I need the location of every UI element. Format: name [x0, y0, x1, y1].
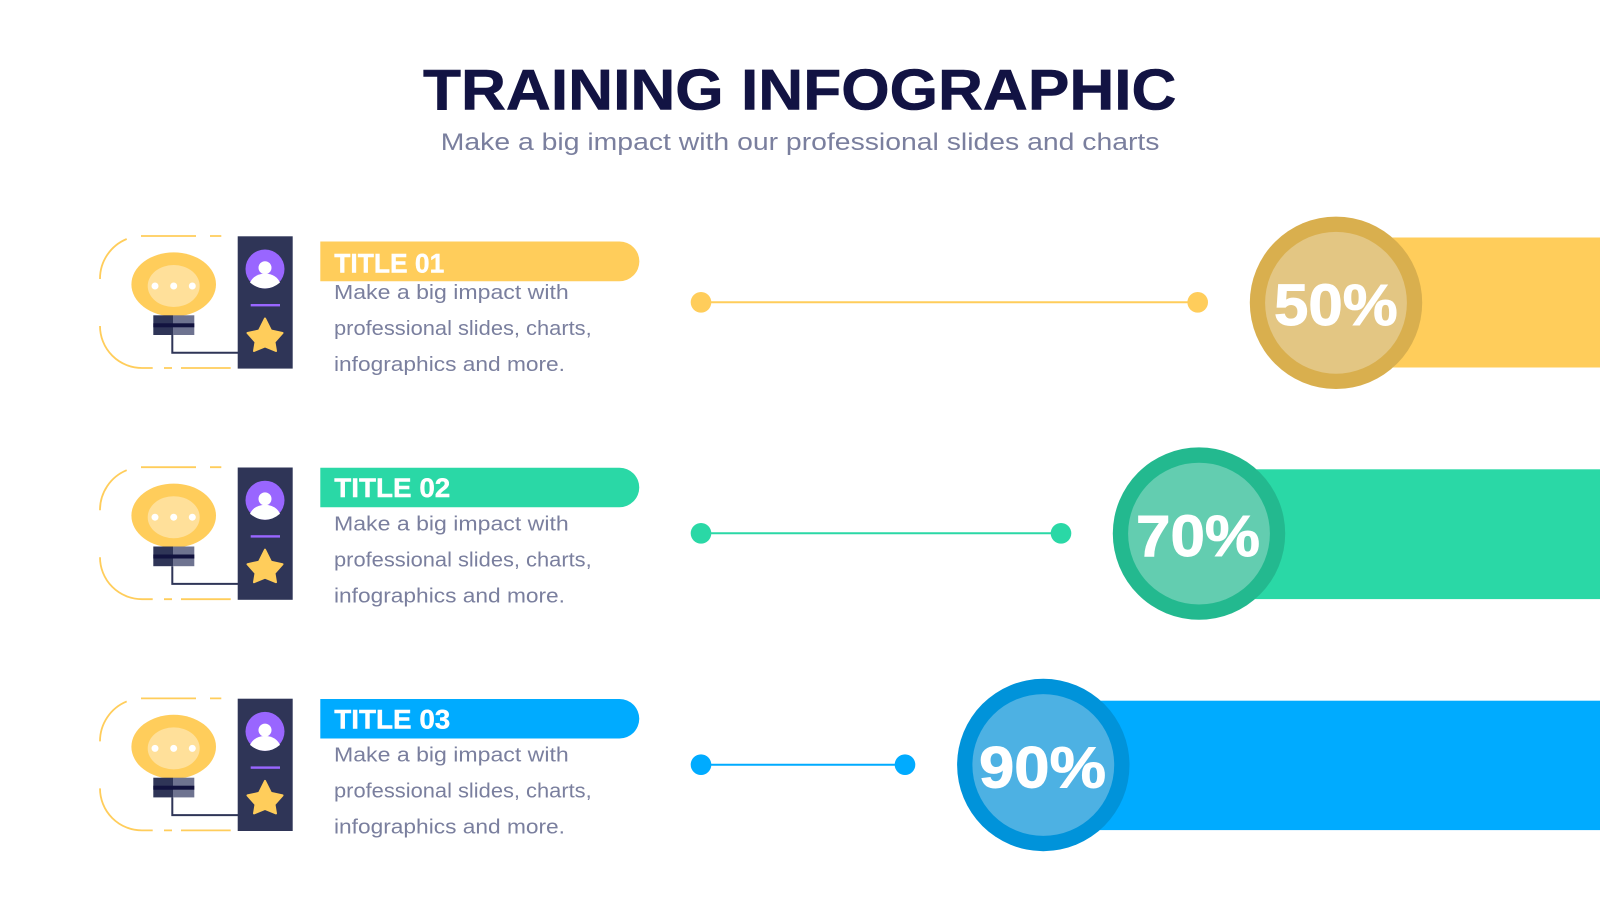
icon: light bulb and profile card — [100, 236, 293, 369]
subtitle: Make a big impact with our professional slides and charts — [441, 129, 1160, 156]
description 01: Make a big impact with — [334, 282, 569, 304]
connector 01 — [691, 292, 1208, 313]
description 03 — [334, 745, 592, 839]
percent badge 90% — [957, 679, 1130, 851]
icon: light bulb and profile card — [100, 467, 293, 600]
title bar 01: TITLE 01 — [334, 249, 444, 279]
icon: light bulb and profile card — [100, 698, 293, 831]
connector 03 — [691, 754, 915, 775]
title bar 02: TITLE 02 — [334, 473, 450, 503]
progress bar 01 — [1336, 238, 1600, 368]
description 01: professional slides, charts, — [334, 318, 592, 340]
percent badge 90%: 90% — [979, 735, 1106, 800]
percent badge 70%: 70% — [1136, 504, 1260, 569]
description 02: professional slides, charts, — [334, 549, 592, 571]
progress bar 02 — [1199, 469, 1600, 599]
description 02: infographics and more. — [334, 585, 565, 607]
connector 02 — [691, 523, 1071, 544]
description 03: infographics and more. — [334, 817, 565, 839]
title bar 03 — [320, 699, 639, 738]
title bar 02 — [320, 468, 639, 507]
description 02: Make a big impact with — [334, 513, 569, 535]
description 02 — [334, 513, 592, 607]
description 03: Make a big impact with — [334, 745, 569, 767]
row 3 — [100, 679, 1600, 851]
title: TRAINING INFOGRAPHIC — [423, 58, 1176, 122]
percent badge 70% — [1113, 447, 1285, 620]
title bar 03: TITLE 03 — [334, 704, 450, 734]
row 1 — [100, 217, 1600, 389]
description 01: infographics and more. — [334, 354, 565, 376]
description 03: professional slides, charts, — [334, 781, 592, 803]
description 01 — [334, 282, 592, 376]
percent badge 50%: 50% — [1274, 273, 1398, 338]
title bar 01 — [320, 242, 639, 281]
percent badge 50% — [1250, 217, 1422, 389]
row 2 — [100, 447, 1600, 620]
progress bar 03 — [1043, 701, 1600, 830]
